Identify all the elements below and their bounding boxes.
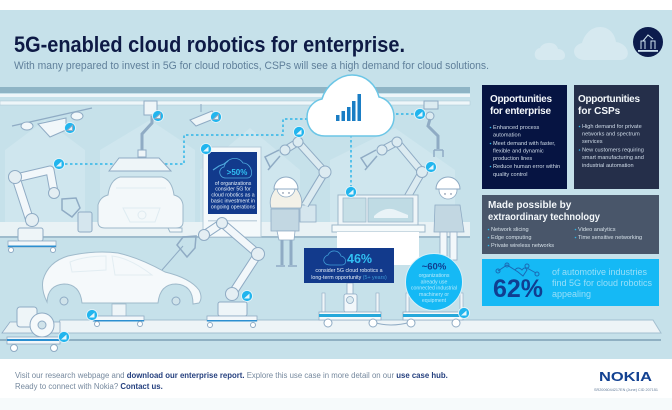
~60% circle callout: organizations bbox=[419, 273, 450, 279]
two connected carts bbox=[319, 283, 470, 327]
tablet screen: >50% bbox=[227, 168, 247, 177]
opportunities for CSPs panel: networks and spectrum bbox=[582, 132, 640, 138]
~60% circle callout: ~60% bbox=[422, 262, 447, 272]
tablet screen: consider 5G for bbox=[215, 186, 251, 192]
icon: robot badge bbox=[633, 27, 663, 57]
opportunities for CSPs panel: Opportunities bbox=[578, 94, 640, 105]
ceiling rails bbox=[0, 87, 470, 105]
46% callout: long-term opportunity (5+ years) bbox=[311, 275, 387, 281]
opportunities for enterprise panel: Opportunities bbox=[490, 94, 552, 105]
made possible panel: Time sensitive networking bbox=[578, 235, 642, 241]
workstation with screens bbox=[332, 186, 425, 265]
hanging gripper right bbox=[414, 101, 443, 157]
made possible panel: Edge computing bbox=[491, 235, 531, 241]
made possible panel bbox=[482, 195, 659, 254]
icon: drone bbox=[12, 108, 92, 137]
opportunities for enterprise panel: Enhanced process bbox=[493, 125, 540, 131]
panel: footer: Ready to connect with Nokia? Contact us. bbox=[15, 382, 163, 391]
opportunities for enterprise panel: flexible and dynamic bbox=[493, 148, 544, 154]
46% callout: 46% bbox=[347, 252, 372, 266]
~60% circle callout: already use bbox=[421, 280, 448, 286]
opportunities for CSPs panel bbox=[574, 85, 659, 189]
opportunities for enterprise panel: production lines bbox=[493, 156, 532, 162]
62% callout: of automotive industries bbox=[552, 267, 648, 277]
made possible panel: Private wireless networks bbox=[491, 243, 554, 249]
robot arm right bbox=[361, 137, 436, 198]
opportunities for enterprise panel: automation bbox=[493, 132, 521, 138]
tablet screen: of organizations bbox=[215, 181, 252, 187]
lower conveyor bbox=[0, 320, 661, 341]
62% callout: appealing bbox=[552, 289, 591, 299]
opportunities for enterprise panel: Reduce human error within bbox=[493, 164, 560, 170]
~60% circle callout bbox=[406, 254, 462, 310]
upper conveyor bbox=[0, 222, 470, 238]
opportunities for enterprise panel: quality control bbox=[493, 172, 528, 178]
opportunities for CSPs panel: High demand for private bbox=[582, 124, 642, 130]
subtitle: With many prepared to invest in 5G for cloud robotics, CSPs will see a high demand for cloud solutions. bbox=[14, 60, 489, 72]
tablet screen: ongoing operations bbox=[211, 204, 255, 210]
dashed network links bbox=[60, 114, 418, 190]
hatchback car on lifter bbox=[42, 252, 201, 326]
panel: footer: Visit our research webpage and download our enterprise report. Explore this use case in more detail on our use case hub. bbox=[15, 371, 448, 380]
62% callout: 62% bbox=[493, 275, 543, 303]
car: top view in upper line bbox=[98, 177, 183, 232]
~60% circle callout: connected industrial bbox=[411, 286, 457, 292]
made possible panel: extraordinary technology bbox=[488, 212, 600, 223]
panel: footer bbox=[0, 359, 672, 410]
robot arm left bbox=[8, 158, 92, 252]
decorative clouds bbox=[535, 27, 628, 60]
opportunities for enterprise panel bbox=[482, 85, 567, 189]
Nokia logo: SR2006044217EN (June) CID 207151 bbox=[594, 388, 658, 392]
factory backdrop shapes bbox=[5, 120, 455, 222]
icon: robotic network bbox=[496, 263, 539, 276]
made possible panel: Made possible by bbox=[488, 200, 572, 211]
opportunities for CSPs panel: services bbox=[582, 139, 603, 145]
opportunities for enterprise panel: Meet demand with faster, bbox=[493, 141, 556, 147]
tablet screen: cloud robotics as a bbox=[211, 192, 255, 198]
made possible panel: Video analytics bbox=[578, 227, 616, 233]
tablet screen: basic investment in bbox=[211, 198, 255, 204]
Nokia logo: NOKIA bbox=[599, 370, 652, 384]
title: 5G-enabled cloud robotics for enterprise. bbox=[14, 32, 405, 57]
opportunities for enterprise panel: for enterprise bbox=[490, 106, 551, 117]
~60% circle callout: machinery or bbox=[419, 292, 449, 298]
motor cart bbox=[2, 307, 70, 352]
opportunities for CSPs panel: for CSPs bbox=[578, 106, 621, 117]
worker: woman bbox=[270, 177, 302, 266]
~60% circle callout: equipment bbox=[422, 298, 447, 304]
62% callout: find 5G for cloud robotics bbox=[552, 278, 653, 288]
46% callout: consider 5G cloud robotics a bbox=[315, 268, 383, 274]
icon: signal bars bbox=[336, 94, 361, 121]
robot arm centre on cart bbox=[162, 218, 264, 328]
46% callout bbox=[304, 248, 394, 283]
icon: ceiling robot arm over car bbox=[109, 101, 171, 171]
Nokia logo bbox=[594, 370, 658, 392]
opportunities for CSPs panel: smart manufacturing and bbox=[582, 155, 644, 161]
robot arm behind worker bbox=[265, 126, 331, 222]
tablet screen bbox=[200, 144, 261, 237]
opportunities for CSPs panel: industrial automation bbox=[582, 163, 634, 169]
opportunities for CSPs panel: New customers requiring bbox=[582, 148, 644, 154]
icon: security camera bbox=[190, 104, 222, 126]
worker: man bbox=[434, 177, 464, 260]
cloud hub bbox=[307, 75, 394, 136]
made possible panel: Network slicing bbox=[491, 227, 529, 233]
62% callout bbox=[482, 259, 659, 306]
